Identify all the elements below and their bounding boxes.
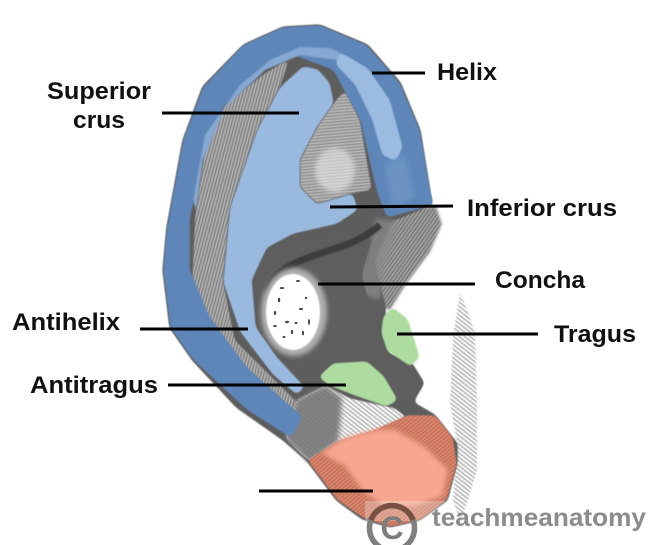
upper concha mid tone xyxy=(355,218,400,300)
label: antitragus: Antitragus xyxy=(30,372,158,399)
label: concha: Concha xyxy=(495,267,586,294)
lobule rim xyxy=(308,414,457,527)
copyright symbol: C xyxy=(380,510,404,545)
watermark panel xyxy=(365,501,445,521)
label: tragus: Tragus xyxy=(554,321,636,348)
concha glow xyxy=(261,268,327,356)
lobule centre xyxy=(322,430,448,506)
concha speckles xyxy=(273,280,310,338)
copyright symbol xyxy=(370,506,414,545)
helix: mid blue streak xyxy=(193,47,365,210)
watermark xyxy=(365,501,646,545)
concha white patch xyxy=(266,274,320,350)
scaphoid fossa xyxy=(192,62,296,410)
intertragic grey wedge xyxy=(286,386,345,464)
triangular fossa xyxy=(300,92,372,203)
label: inferior crus: Inferior crus xyxy=(467,195,617,222)
label: helix: Helix xyxy=(437,59,498,86)
label: superior crus xyxy=(47,78,299,134)
tragus xyxy=(381,307,420,367)
intertragic hatching xyxy=(286,386,405,460)
label: superior crus: Superior xyxy=(47,78,151,105)
antitragus xyxy=(318,361,398,407)
label: superior crus: crus xyxy=(73,107,125,134)
lobule xyxy=(308,414,457,527)
helix: dark blue band xyxy=(163,25,434,438)
leader line: lobule xyxy=(259,490,373,492)
label: helix xyxy=(372,59,498,86)
upper concha hatching xyxy=(375,208,444,311)
right cheek strip xyxy=(449,294,478,520)
ear illustration xyxy=(162,24,481,532)
concha curved dark band xyxy=(268,225,380,292)
label: antihelix: Antihelix xyxy=(12,309,121,336)
helix: light blue highlight xyxy=(335,52,403,162)
concha floor xyxy=(252,226,424,402)
antihelix xyxy=(223,66,358,395)
helix: lower right shade xyxy=(385,155,415,207)
watermark wordmark: teachmeanatomy xyxy=(432,504,646,532)
ear base xyxy=(162,24,458,528)
